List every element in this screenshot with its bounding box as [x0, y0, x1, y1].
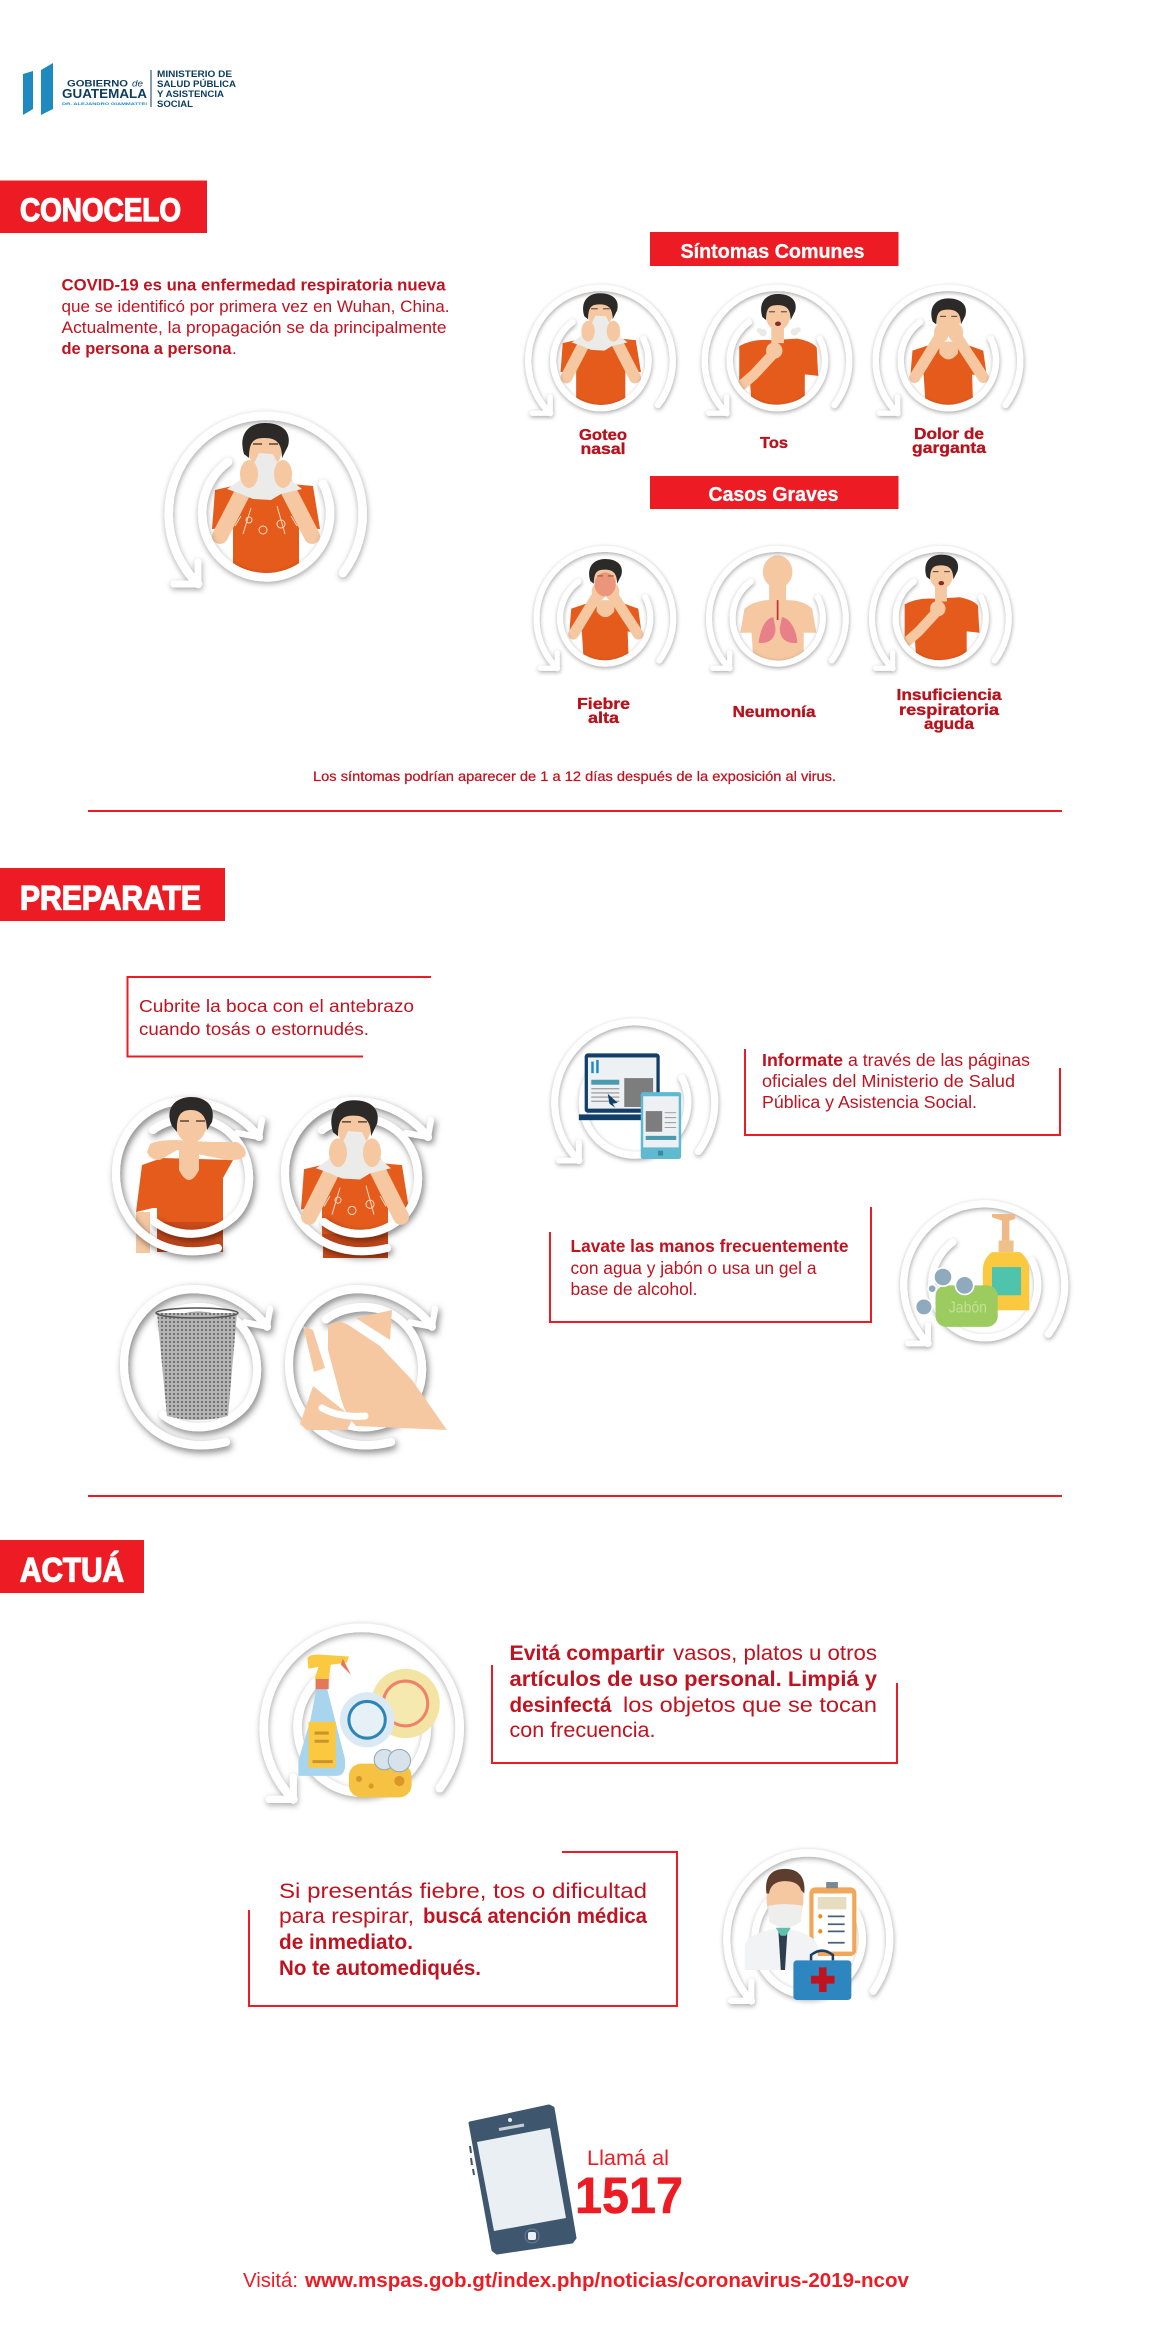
symptom: Goteo nasal: Goteo: [579, 427, 627, 444]
callout: Informate: Informate: [762, 1050, 843, 1070]
section heading: ACTUÁ: [0, 1540, 144, 1593]
symptom: Dolor de garganta: [876, 288, 1020, 457]
callout: Evitá compartir: Evitá compartir: [510, 1642, 664, 1665]
soap bar: [936, 1285, 998, 1327]
text block: COVID-19 description: .: [232, 339, 237, 358]
logo wordmark: SALUD PÚBLICA: [157, 78, 236, 90]
severe case: Fiebre alta: Fiebre: [577, 696, 630, 713]
logo wordmark: de: [132, 78, 143, 88]
text block: COVID-19 description: Actualmente, la propagación se da principalmente: [62, 318, 446, 337]
link: Visitá website: Visitá:: [243, 2270, 298, 2292]
callout: Informate: oficiales del Ministerio de Salud: [762, 1071, 1015, 1091]
logo wordmark: [62, 69, 236, 110]
callout: Cubrite la boca: cuando tosás o estornudés.: [139, 1019, 369, 1039]
callout: Cubrite la boca: Cubrite la boca con el antebrazo: [139, 996, 414, 1016]
symptom: Dolor de garganta: Dolor de: [914, 426, 984, 443]
symptom: Tos: Tos: [760, 435, 788, 452]
link: Visitá website: www.mspas.gob.gt/index.php/noticias/coronavirus-2019-ncov: [304, 2270, 910, 2292]
section heading: PREPARATE: PREPARATE: [20, 880, 201, 918]
icon: body with lungs: [740, 555, 816, 661]
icon: soap and hand gel: [904, 1204, 1065, 1343]
callout: Informate: a través de las páginas: [848, 1050, 1030, 1070]
logo wordmark: MINISTERIO DE: [157, 69, 232, 80]
logo wordmark: DR. ALEJANDRO GIAMMATTEI: [62, 101, 147, 106]
callout: Si presentás fiebre: Si presentás fiebre, tos o dificultad: [279, 1880, 647, 1903]
callout: Lavate las manos: [550, 1207, 871, 1322]
callout: Lavate las manos: base de alcohol.: [570, 1279, 698, 1299]
icon: doctor with clipboard and kit: [727, 1853, 890, 2001]
icon: smartphone: [470, 2106, 575, 2253]
banner: Casos Graves: Casos Graves: [708, 484, 838, 506]
icon: mesh trash basket: [124, 1289, 270, 1445]
banner: Síntomas Comunes: [650, 232, 898, 266]
callout: Evitá compartir: [492, 1642, 897, 1763]
symptom: Tos: [705, 288, 849, 452]
severe case: Neumonía: [709, 549, 846, 721]
logo: Gobierno de Guatemala: [23, 63, 236, 115]
icon: person sneezing in tissue: [169, 416, 363, 584]
callout: Si presentás fiebre: buscá atención médica: [423, 1905, 647, 1928]
logo wordmark: GOBIERNO: [67, 78, 128, 90]
logo wordmark: SOCIAL: [157, 99, 193, 110]
severe case: Insuficiencia respiratoria aguda: Insuficiencia: [896, 687, 1002, 704]
bubbles: [916, 1268, 974, 1315]
callout: Informate: [745, 1049, 1060, 1135]
sponge: [349, 1749, 412, 1797]
symptom: Goteo nasal: nasal: [580, 441, 626, 458]
icon: person sneezing in tissue: [285, 1100, 431, 1258]
medical case: [793, 1951, 851, 2000]
text block: COVID-19 description: de persona a persona: [62, 339, 232, 358]
icon: cleaning products: [264, 1628, 460, 1799]
note: symptom onset: Los síntomas podrían aparecer de 1 a 12 días después de la exposición al virus.: [313, 768, 836, 784]
icon: person covering mouth with forearm: [116, 1097, 262, 1253]
icon: soap and hand gel: Jabón: [949, 1300, 987, 1317]
call to action: Llamá al 1517: Llamá al: [587, 2147, 669, 2170]
banner: Síntomas Comunes: Síntomas Comunes: [680, 241, 864, 263]
gel bottle: [983, 1214, 1029, 1310]
text block: COVID-19 description: [62, 276, 449, 358]
section heading: CONOCELO: [0, 180, 207, 233]
callout: Evitá compartir: artículos de uso personal. Limpiá y: [510, 1668, 877, 1691]
text block: COVID-19 description: COVID-19 es una enfermedad respiratoria nueva: [62, 276, 446, 294]
severe case: Insuficiencia respiratoria aguda: aguda: [924, 716, 974, 733]
symptom: Dolor de garganta: garganta: [912, 440, 986, 457]
severe case: Insuficiencia respiratoria aguda: [872, 549, 1009, 733]
laptop: [579, 1053, 660, 1120]
icon: laptop and tablet: [555, 1022, 715, 1161]
section heading: PREPARATE: [0, 868, 225, 921]
severe case: Neumonía: Neumonía: [732, 704, 816, 721]
severe case: Fiebre alta: alta: [588, 710, 619, 727]
section heading: CONOCELO: CONOCELO: [20, 192, 181, 228]
banner: Casos Graves: [650, 476, 898, 509]
section heading: ACTUÁ: ACTUÁ: [20, 1552, 124, 1590]
callout: Si presentás fiebre: de inmediato.: [279, 1931, 413, 1954]
logo wordmark: GUATEMALA: [62, 86, 148, 101]
callout: Evitá compartir: desinfectá: [510, 1694, 612, 1717]
callout: Evitá compartir: los objetos que se tocan: [623, 1694, 877, 1717]
callout: Lavate las manos: Lavate las manos frecuentemente: [570, 1236, 849, 1256]
plates: [340, 1669, 440, 1747]
callout: Si presentás fiebre: No te automediqués.: [279, 1957, 481, 1980]
spray bottle: [298, 1655, 351, 1776]
callout: Evitá compartir: vasos, platos u otros: [673, 1642, 877, 1665]
callout: Si presentás fiebre: [249, 1852, 677, 2006]
icon: logo bars: [23, 63, 53, 115]
callout: Cubrite la boca: [128, 977, 431, 1056]
callout: Lavate las manos: con agua y jabón o usa un gel a: [570, 1258, 817, 1278]
icon: washing hands with foam: [289, 1289, 447, 1445]
tablet: [641, 1092, 681, 1159]
callout: Si presentás fiebre: para respirar,: [279, 1905, 414, 1928]
doctor: [745, 1869, 818, 1970]
severe case: Fiebre alta: [537, 549, 673, 727]
clipboard: [809, 1882, 856, 1956]
callout: Evitá compartir: con frecuencia.: [510, 1719, 656, 1742]
symptom: Goteo nasal: [528, 288, 673, 458]
text block: COVID-19 description: que se identificó por primera vez en Wuhan, China.: [62, 297, 449, 316]
call to action: Llamá al 1517: 1517: [575, 2167, 683, 2224]
callout: Informate: Pública y Asistencia Social.: [762, 1092, 977, 1112]
logo wordmark: Y ASISTENCIA: [157, 89, 224, 100]
severe case: Insuficiencia respiratoria aguda: respiratoria: [899, 702, 999, 719]
